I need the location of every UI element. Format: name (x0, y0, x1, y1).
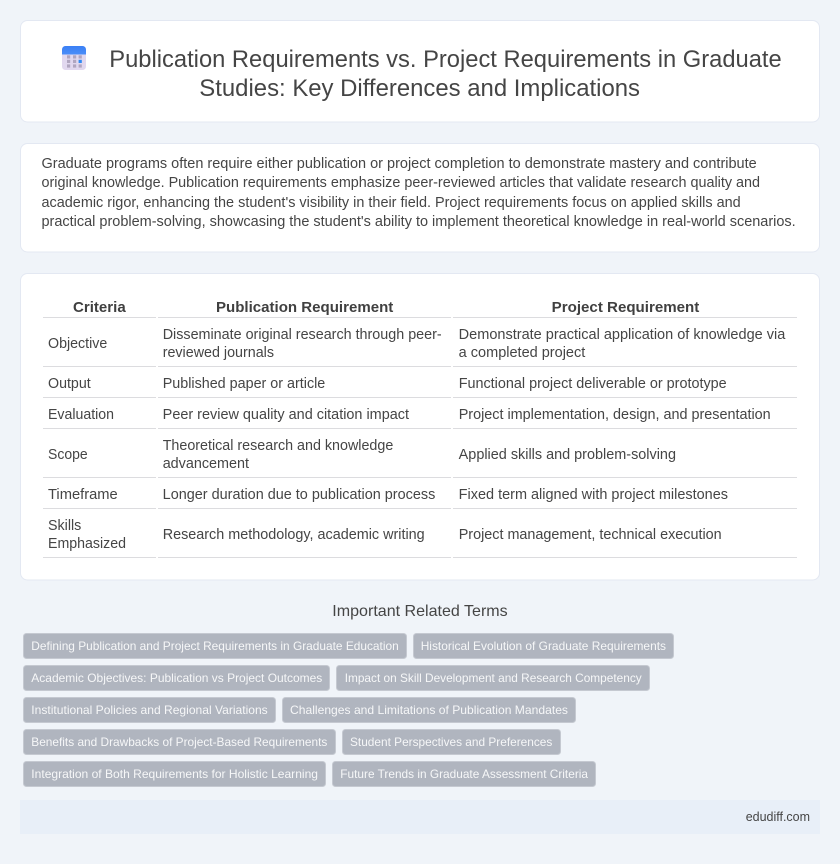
table row: Timeframe: Timeframe (48, 487, 118, 503)
table row: Skills Emphasized: Project management, technical execution (459, 527, 722, 543)
table row: Scope: advancement (163, 456, 249, 472)
tag: Future Trends in Graduate Assessment Criteria (340, 767, 588, 781)
tag (24, 762, 326, 786)
table header row (43, 300, 797, 318)
tag: Student Perspectives and Preferences (350, 735, 552, 749)
table row: Evaluation (43, 407, 797, 429)
icon: calendar (62, 46, 86, 70)
table row: Scope (43, 438, 797, 478)
title (109, 46, 782, 102)
table row: Scope: Applied skills and problem-solving (459, 447, 676, 463)
table row: Evaluation: Evaluation (48, 407, 114, 423)
text block: introduction paragraph: original knowledge. Publication requirements emphasize peer-reviewed articles that validate research quality and (42, 175, 760, 191)
tag (342, 730, 560, 754)
table row: Timeframe: Fixed term aligned with project milestones (459, 487, 728, 503)
table row: Objective: Disseminate original research through peer- (163, 327, 442, 343)
table header row: Project Requirement (552, 300, 699, 316)
table row: Evaluation: Peer review quality and citation impact (163, 407, 409, 423)
table row: Output: Functional project deliverable or prototype (459, 376, 727, 392)
table row: Skills Emphasized: Research methodology, academic writing (163, 527, 425, 543)
table row: Timeframe (43, 487, 797, 509)
panel: header (20, 20, 820, 122)
tag: Defining Publication and Project Requirements in Graduate Education (31, 639, 399, 653)
table row: Scope: Theoretical research and knowledge (163, 438, 393, 454)
table row: Output: Published paper or article (163, 376, 325, 392)
tag (24, 698, 276, 722)
tag (24, 634, 406, 658)
tag (332, 762, 596, 786)
text block: introduction paragraph (42, 156, 796, 230)
table row: Scope: Scope (48, 447, 88, 463)
title: Studies: Key Differences and Implications (199, 75, 640, 102)
tag (24, 666, 330, 690)
table row: Objective: reviewed journals (163, 345, 274, 361)
table row: Objective: a completed project (459, 345, 585, 361)
table row: Objective: Demonstrate practical application of knowledge via (459, 327, 785, 343)
text block: introduction paragraph: academic rigor, enhancing the student's visibility in their field. Project requirements focus on applied skills and (42, 195, 741, 211)
tag: Historical Evolution of Graduate Requirements (421, 639, 666, 653)
tag (282, 698, 576, 722)
panel: comparison table (20, 274, 820, 580)
tag: Integration of Both Requirements for Holistic Learning (31, 767, 318, 781)
tag (414, 634, 674, 658)
title: Publication Requirements vs. Project Requirements in Graduate (109, 46, 782, 73)
text block: introduction paragraph: practical problem-solving, showcasing the student's ability to implement theoretical knowledge in real-world scenarios. (42, 214, 796, 230)
tag: Institutional Policies and Regional Variations (31, 703, 268, 717)
tag (336, 666, 650, 690)
text block: introduction paragraph: Graduate programs often require either publication or project completion to demonstrate mastery and contribute (42, 156, 757, 172)
table row: Objective (43, 327, 797, 367)
panel: introduction (20, 144, 820, 252)
table header row: Publication Requirement (216, 300, 393, 316)
table row: Objective: Objective (48, 336, 107, 352)
footer (20, 800, 820, 834)
table row: Skills Emphasized: Skills (48, 518, 81, 534)
table row: Timeframe: Longer duration due to publication process (163, 487, 435, 503)
tag (24, 730, 336, 754)
table row: Skills Emphasized (43, 518, 797, 558)
tag: Impact on Skill Development and Research Competency (345, 671, 642, 685)
tag: Challenges and Limitations of Publication Mandates (290, 703, 568, 717)
footer: edudiff.com (746, 809, 810, 824)
table row: Skills Emphasized: Emphasized (48, 536, 126, 552)
panel: related term tags (24, 634, 674, 786)
table row: Output: Output (48, 376, 91, 392)
tag: Academic Objectives: Publication vs Project Outcomes (31, 671, 322, 685)
tag: Benefits and Drawbacks of Project-Based Requirements (31, 735, 327, 749)
table row: Output (43, 376, 797, 398)
heading: important related terms: Important Related Terms (332, 603, 508, 620)
table row: Evaluation: Project implementation, design, and presentation (459, 407, 771, 423)
table header row: Criteria (73, 300, 126, 316)
